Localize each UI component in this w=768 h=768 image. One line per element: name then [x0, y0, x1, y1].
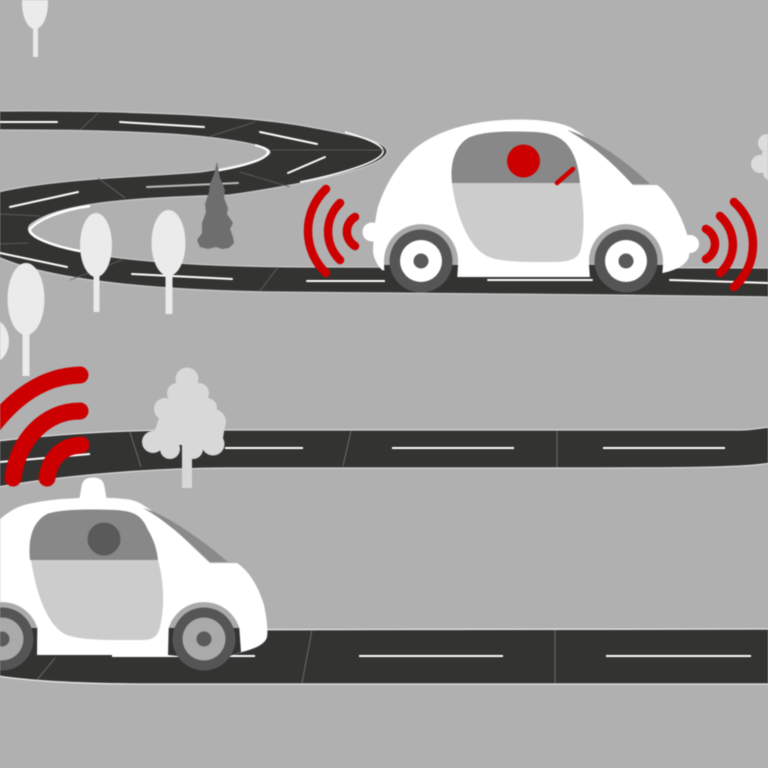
sensor waves: rear	[706, 202, 753, 287]
winding road: middle	[0, 427, 768, 487]
tree: slim light 3	[8, 263, 44, 376]
front wheel	[384, 224, 458, 292]
front sensor nub	[362, 222, 382, 242]
tree: round-leaved	[142, 368, 226, 488]
rear window	[567, 130, 650, 184]
roof sensor dome	[79, 478, 107, 500]
door panel	[452, 183, 584, 262]
tree: top left, cropped	[22, 0, 48, 57]
wireless signal arcs	[0, 375, 81, 478]
tree: cropped right edge	[751, 134, 768, 181]
passenger head	[507, 144, 540, 178]
tree: slim light 1	[80, 213, 112, 312]
sensor waves: front	[308, 189, 355, 273]
rear window	[143, 508, 228, 562]
winding road: top	[0, 111, 768, 297]
car body	[0, 498, 267, 656]
tree: cropped left edge	[0, 319, 9, 363]
passenger head	[88, 522, 120, 556]
tree: dark conifer	[197, 162, 234, 249]
door panel	[31, 560, 163, 640]
window	[30, 509, 158, 560]
tree: slim light 2	[152, 210, 186, 314]
car: lower, with roof sensor	[0, 478, 267, 670]
rear wheel	[0, 602, 37, 670]
car body	[373, 119, 690, 277]
window	[452, 132, 580, 183]
winding road: bottom	[0, 629, 768, 684]
front wheel	[168, 602, 241, 670]
rear wheel	[589, 224, 663, 292]
car: upper, with red sensors	[362, 119, 699, 292]
rear sensor nub	[681, 235, 699, 253]
seat belt	[557, 169, 573, 183]
